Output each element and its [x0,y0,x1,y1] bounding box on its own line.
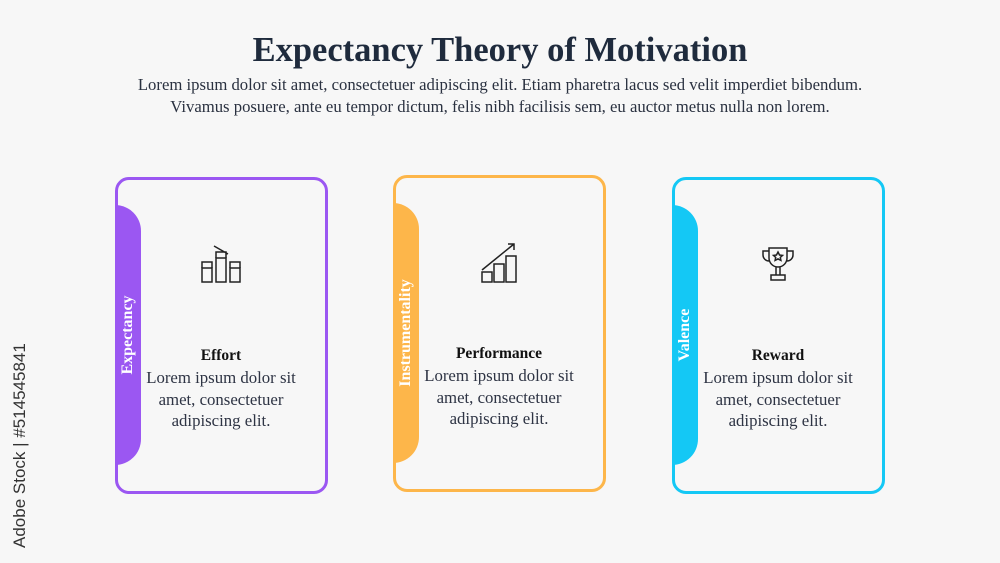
icon: growth bars [481,243,517,283]
tab: valence: Valence [676,309,693,361]
icon: raised fists [201,245,241,283]
tab: instrumentality: Instrumentality [397,279,414,387]
text: performance: Lorem ipsum dolor sit amet, consectetuer adipiscing elit. [424,366,574,428]
tab: instrumentality [393,203,419,463]
icon: trophy [762,247,794,281]
text: reward: Reward [752,347,804,364]
panel: effort [115,177,328,494]
tab: valence [672,205,698,465]
title: Expectancy Theory of Motivation [253,31,747,69]
tab: expectancy: Expectancy [119,295,136,375]
panel: reward [672,177,885,494]
panel: performance [393,175,606,492]
subtitle: Lorem ipsum dolor sit amet, consectetuer adipiscing elit. Etiam pharetra lacus sed velit imperdiet bibendum. [138,75,862,94]
subtitle [138,75,862,116]
text: effort: Lorem ipsum dolor sit amet, consectetuer adipiscing elit. [146,368,296,430]
text: effort: Effort [201,347,241,364]
watermark text: Adobe Stock | #514545841 [10,343,29,548]
tab: expectancy [115,205,141,465]
subtitle: Vivamus posuere, ante eu tempor dictum, felis nibh facilisis sem, eu auctor metus nulla non lorem. [170,96,830,116]
text: performance: Performance [456,345,542,362]
text: reward: Lorem ipsum dolor sit amet, consectetuer adipiscing elit. [703,368,853,430]
